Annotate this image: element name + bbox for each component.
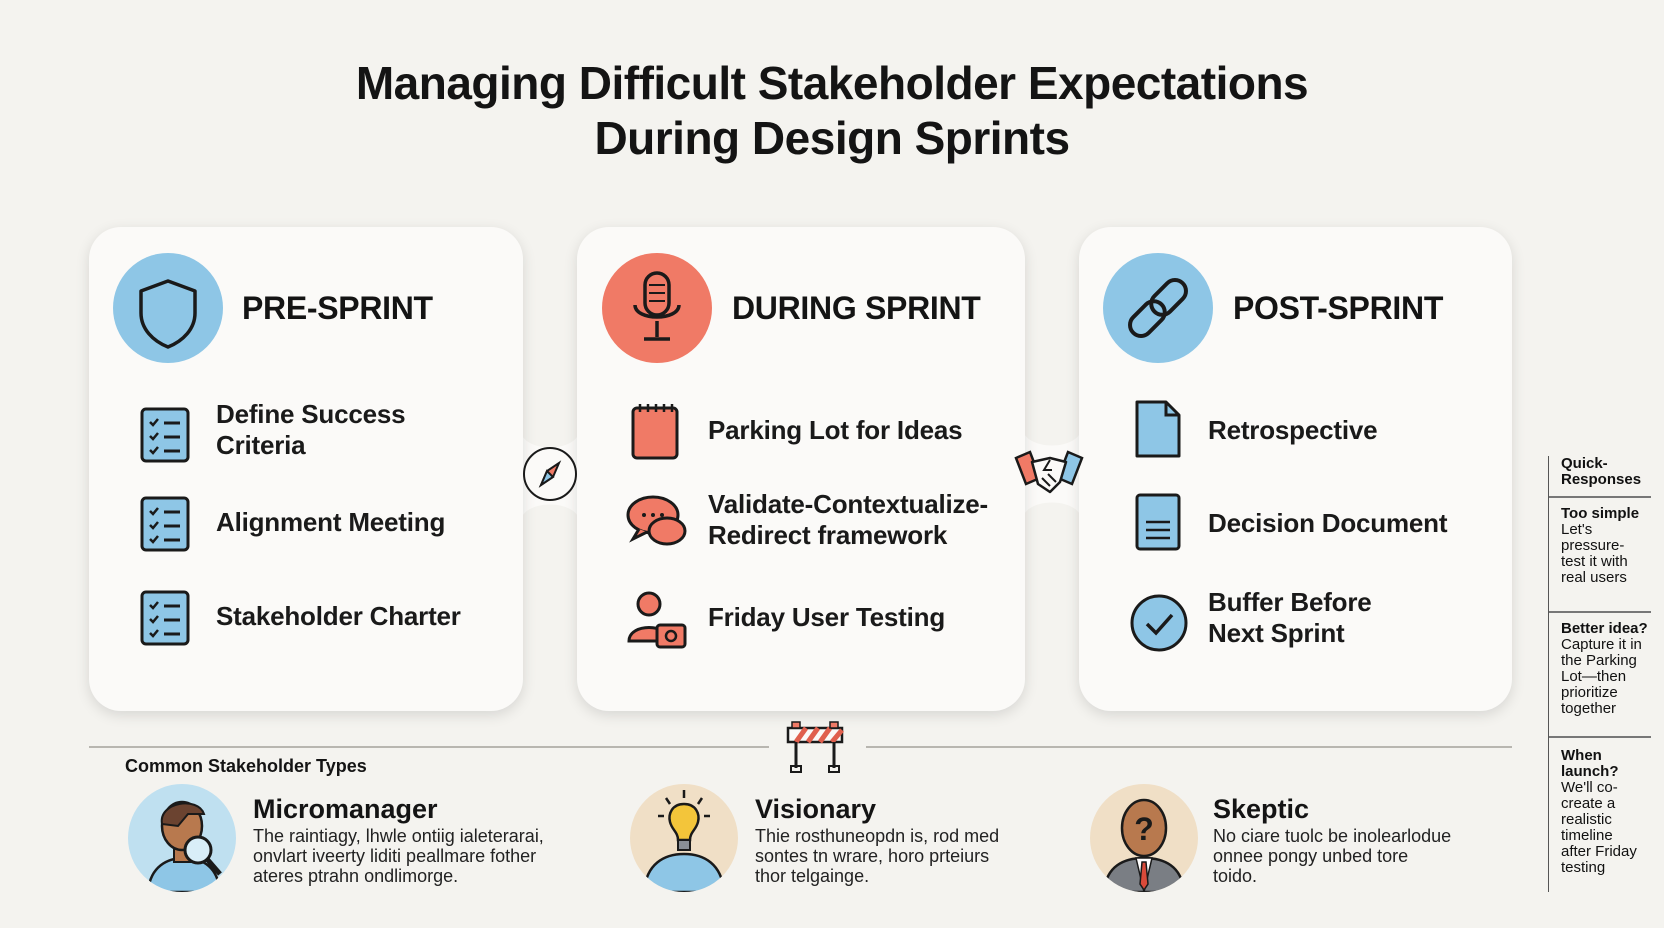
item: buffer: Buffer Before <box>1208 587 1372 617</box>
panel: pre-sprint <box>89 227 523 711</box>
response: too simple: Too simple <box>1561 505 1639 522</box>
bridge between during and post <box>1025 436 1079 512</box>
sidebar heading: Responses <box>1561 471 1641 488</box>
heading: POST-SPRINT <box>1233 290 1443 326</box>
stakeholder: visionary: thor telgainge. <box>755 866 869 886</box>
heading: DURING SPRINT <box>732 290 981 326</box>
icon: compass connector <box>523 447 577 501</box>
response: better idea: Capture it in <box>1561 636 1642 653</box>
title: Managing Difficult Stakeholder Expectations <box>356 57 1308 109</box>
avatar <box>630 784 738 892</box>
item: stakeholder charter: Stakeholder Charter <box>216 601 461 631</box>
item: buffer <box>1130 587 1372 652</box>
stakeholder: visionary: Visionary <box>755 794 876 824</box>
title: During Design Sprints <box>594 112 1070 164</box>
sidebar: quick responses <box>1548 456 1664 892</box>
item: alignment meeting: Alignment Meeting <box>216 507 445 537</box>
icon: microphone <box>602 253 712 363</box>
response: too simple: pressure- <box>1561 537 1624 554</box>
item: decision document <box>1136 494 1448 550</box>
heading: PRE-SPRINT <box>242 290 433 326</box>
stakeholder: skeptic: toido. <box>1213 866 1257 886</box>
item: success criteria: Criteria <box>216 430 305 460</box>
item: VCR framework: Validate-Contextualize- <box>708 489 988 519</box>
item: parking lot: Parking Lot for Ideas <box>708 415 962 445</box>
stakeholder: micromanager: The raintiagy, lhwle ontiig ialeterarai, <box>253 826 544 846</box>
response: when launch: We'll co- <box>1561 779 1618 796</box>
avatar <box>128 784 236 892</box>
stakeholder: skeptic: Skeptic <box>1213 794 1309 824</box>
icon: chain link <box>1103 253 1213 363</box>
response: when launch: launch? <box>1561 763 1619 780</box>
section label: Common Stakeholder Types <box>125 756 367 776</box>
response: too simple: real users <box>1561 569 1627 586</box>
item: retrospective <box>1136 400 1377 458</box>
item: VCR framework: Redirect framework <box>708 520 947 550</box>
item: decision document: Decision Document <box>1208 508 1447 538</box>
item: parking lot <box>632 404 962 460</box>
stakeholder: micromanager: onvlart iveerty liditi peallmare fother <box>253 846 536 866</box>
response: better idea: together <box>1561 700 1616 717</box>
item: success criteria <box>140 399 405 462</box>
item: alignment meeting <box>140 496 445 552</box>
response: too simple: test it with <box>1561 553 1628 570</box>
divider line <box>89 746 769 748</box>
stakeholder: skeptic: No ciare tuolc be inolearlodue <box>1213 826 1451 846</box>
response: better idea: Better idea? <box>1561 620 1648 637</box>
sidebar heading <box>1561 455 1641 488</box>
avatar <box>1090 784 1198 892</box>
stakeholder: visionary: sontes tn wrare, horo prteiurs <box>755 846 989 866</box>
stakeholder: micromanager: Micromanager <box>253 794 438 824</box>
response: when launch: create a <box>1561 795 1615 812</box>
response: better idea <box>1561 620 1648 717</box>
item: buffer: Next Sprint <box>1208 618 1344 648</box>
panel: post-sprint <box>1079 227 1512 711</box>
stakeholder: skeptic: onnee pongy unbed tore <box>1213 846 1408 866</box>
response: when launch: When <box>1561 747 1602 764</box>
item: stakeholder charter <box>140 590 461 646</box>
item: friday user testing: Friday User Testing <box>708 602 945 632</box>
stakeholder: visionary <box>630 784 999 892</box>
response: better idea: prioritize <box>1561 684 1618 701</box>
item: VCR framework <box>626 489 988 550</box>
icon: handshake connector <box>1014 450 1084 494</box>
response: when launch: after Friday <box>1561 843 1637 860</box>
item: retrospective: Retrospective <box>1208 415 1377 445</box>
item: success criteria: Define Success <box>216 399 405 429</box>
response: too simple: Let's <box>1561 521 1592 538</box>
stakeholder: micromanager <box>128 784 544 892</box>
stakeholder: visionary: Thie rosthuneopdn is, rod med <box>755 826 999 846</box>
panel: during sprint <box>577 227 1025 711</box>
response: when launch: realistic <box>1561 811 1612 828</box>
stakeholder: micromanager: ateres ptrahn ondlimorge. <box>253 866 458 886</box>
icon: shield <box>113 253 223 363</box>
response: too simple <box>1561 505 1639 586</box>
sidebar heading: Quick- <box>1561 455 1608 472</box>
avatar: ? <box>1134 811 1154 847</box>
response: when launch: timeline <box>1561 827 1613 844</box>
response: when launch <box>1561 747 1637 876</box>
icon: barrier <box>786 721 844 773</box>
item: friday user testing <box>628 592 945 648</box>
response: better idea: Lot—then <box>1561 668 1626 685</box>
title <box>356 57 1308 164</box>
bridge between pre and during <box>523 438 577 514</box>
response: when launch: testing <box>1561 859 1605 876</box>
response: better idea: the Parking <box>1561 652 1637 669</box>
stakeholder: skeptic <box>1090 784 1451 892</box>
